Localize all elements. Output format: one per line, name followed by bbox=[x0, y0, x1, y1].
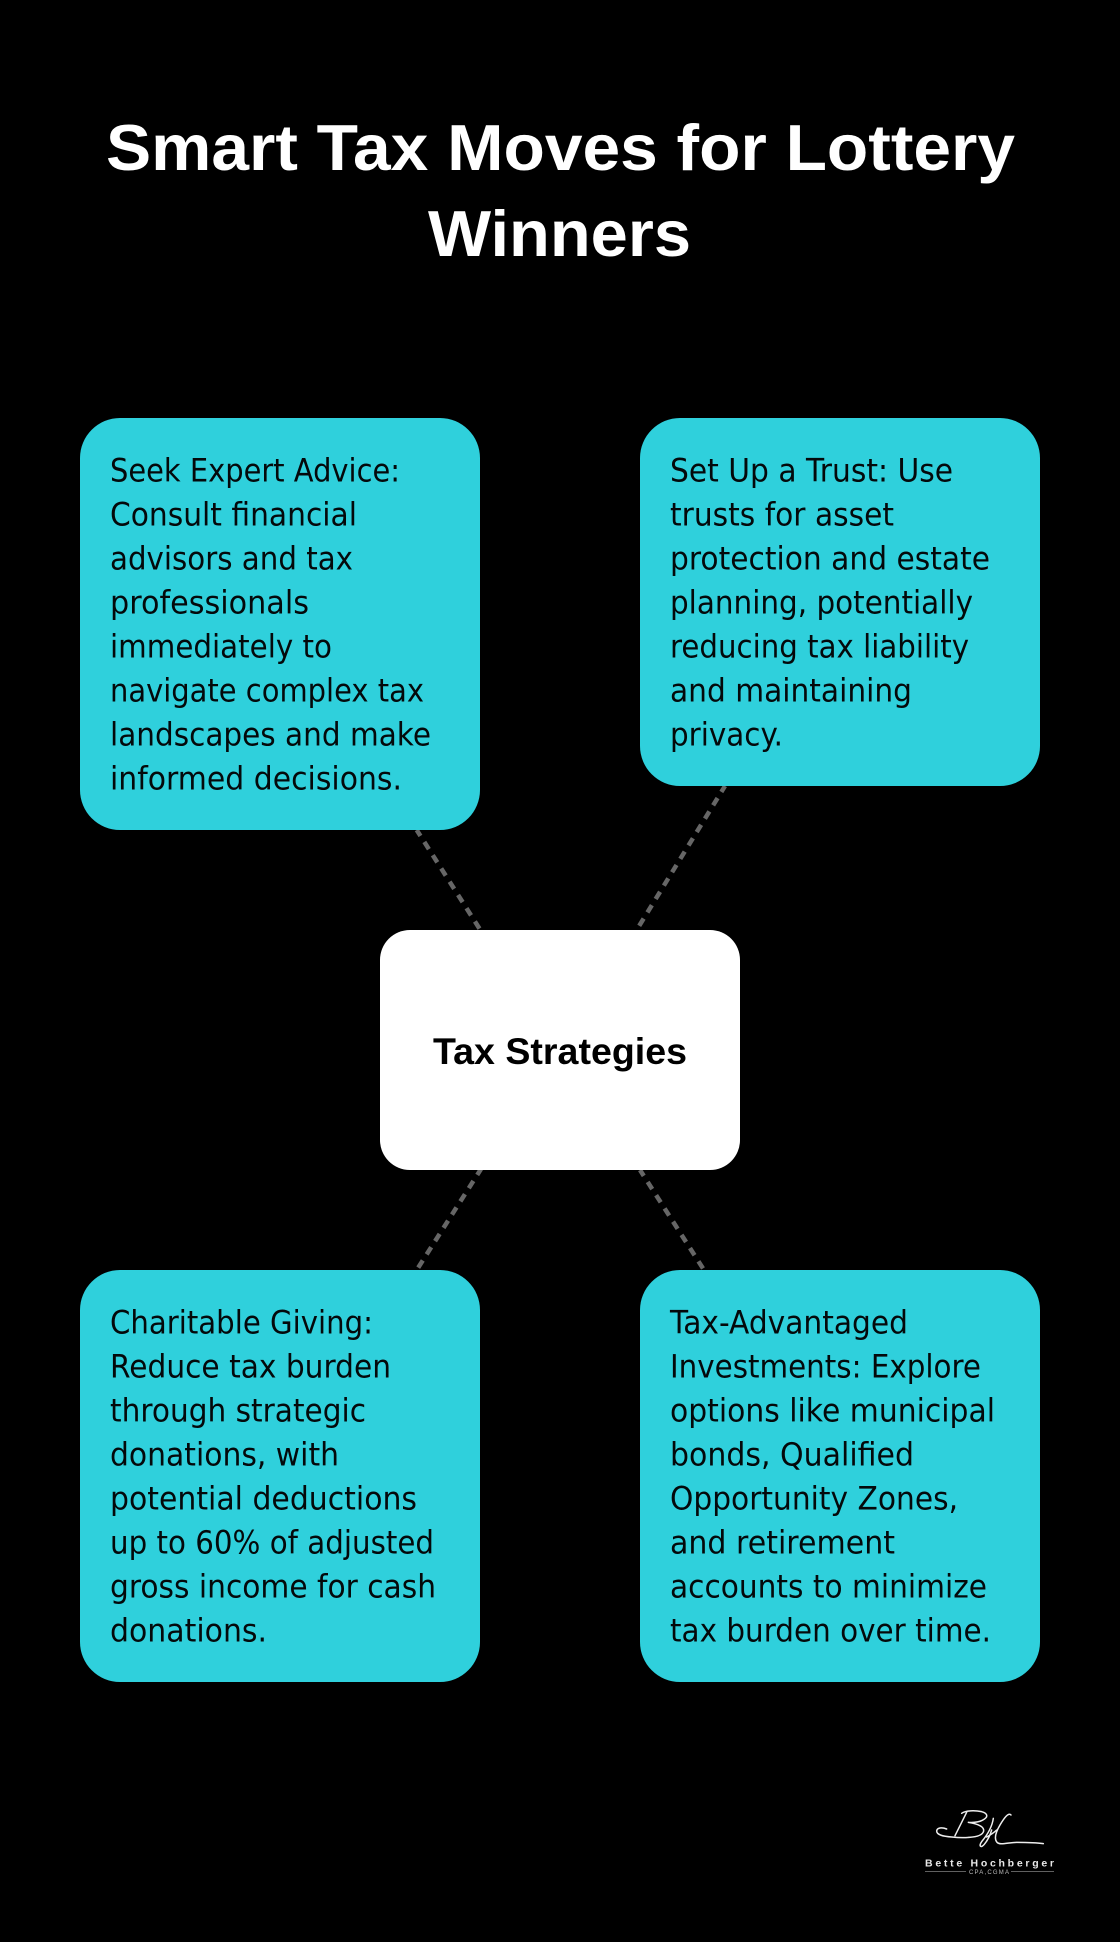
panel: seek expert advice: landscapes and make bbox=[110, 716, 431, 754]
panel: set up a trust: protection and estate bbox=[670, 540, 990, 578]
logo name: Bette Hochberger bbox=[925, 1858, 1054, 1870]
panel: seek expert advice: advisors and tax bbox=[110, 540, 353, 578]
panel: seek expert advice: Seek Expert Advice: bbox=[110, 452, 400, 490]
panel: seek expert advice: navigate complex tax bbox=[110, 672, 424, 710]
title: Smart Tax Moves for Lottery bbox=[106, 111, 1015, 184]
title: Winners bbox=[428, 197, 691, 270]
panel: tax-advantaged investments: Tax-Advantaged bbox=[669, 1304, 908, 1342]
panel: tax-advantaged investments: tax burden over time. bbox=[670, 1612, 991, 1650]
panel: tax-advantaged investments: options like municipal bbox=[670, 1392, 995, 1430]
panel: center tax strategies: Tax Strategies bbox=[433, 1031, 687, 1072]
dashed connectors bbox=[417, 786, 725, 1270]
panel: set up a trust: reducing tax liability bbox=[670, 628, 969, 666]
panel: seek expert advice bbox=[80, 418, 480, 830]
panel: seek expert advice: immediately to bbox=[110, 628, 332, 666]
panel: tax-advantaged investments: Opportunity Zones, bbox=[670, 1480, 958, 1518]
panel: tax-advantaged investments: bonds, Qualified bbox=[670, 1436, 914, 1474]
title bbox=[106, 111, 1015, 270]
panel: tax-advantaged investments: Investments: Explore bbox=[670, 1348, 981, 1386]
panel: center tax strategies bbox=[380, 930, 740, 1170]
icon: signature mark bbox=[937, 1811, 1043, 1846]
panel: charitable giving: through strategic bbox=[110, 1392, 366, 1430]
logo credentials: CPA,CGMA bbox=[969, 1870, 1009, 1876]
panel: set up a trust: planning, potentially bbox=[670, 584, 973, 622]
panel: charitable giving: potential deductions bbox=[110, 1480, 417, 1518]
panel: set up a trust: and maintaining bbox=[670, 672, 912, 710]
panel: charitable giving: gross income for cash bbox=[110, 1568, 436, 1606]
logo: Bette Hochberger signature bbox=[925, 1811, 1054, 1876]
panel: set up a trust bbox=[640, 418, 1040, 786]
panel: charitable giving: up to 60% of adjusted bbox=[110, 1524, 434, 1562]
panel: charitable giving: Charitable Giving: bbox=[110, 1304, 373, 1342]
panel: charitable giving: Reduce tax burden bbox=[110, 1348, 391, 1386]
panel: set up a trust: privacy. bbox=[670, 716, 783, 754]
panel: charitable giving bbox=[80, 1270, 480, 1682]
panel: charitable giving: donations, with bbox=[110, 1436, 339, 1474]
panel: tax-advantaged investments bbox=[640, 1270, 1040, 1682]
panel: tax-advantaged investments: and retirement bbox=[670, 1524, 895, 1562]
panel: seek expert advice: Consult financial bbox=[110, 496, 357, 534]
panel: set up a trust: trusts for asset bbox=[670, 496, 894, 534]
panel: charitable giving: donations. bbox=[110, 1612, 267, 1650]
panel: set up a trust: Set Up a Trust: Use bbox=[670, 452, 953, 490]
panel: seek expert advice: informed decisions. bbox=[110, 760, 402, 798]
panel: seek expert advice: professionals bbox=[110, 584, 309, 622]
panel: tax-advantaged investments: accounts to minimize bbox=[670, 1568, 987, 1606]
